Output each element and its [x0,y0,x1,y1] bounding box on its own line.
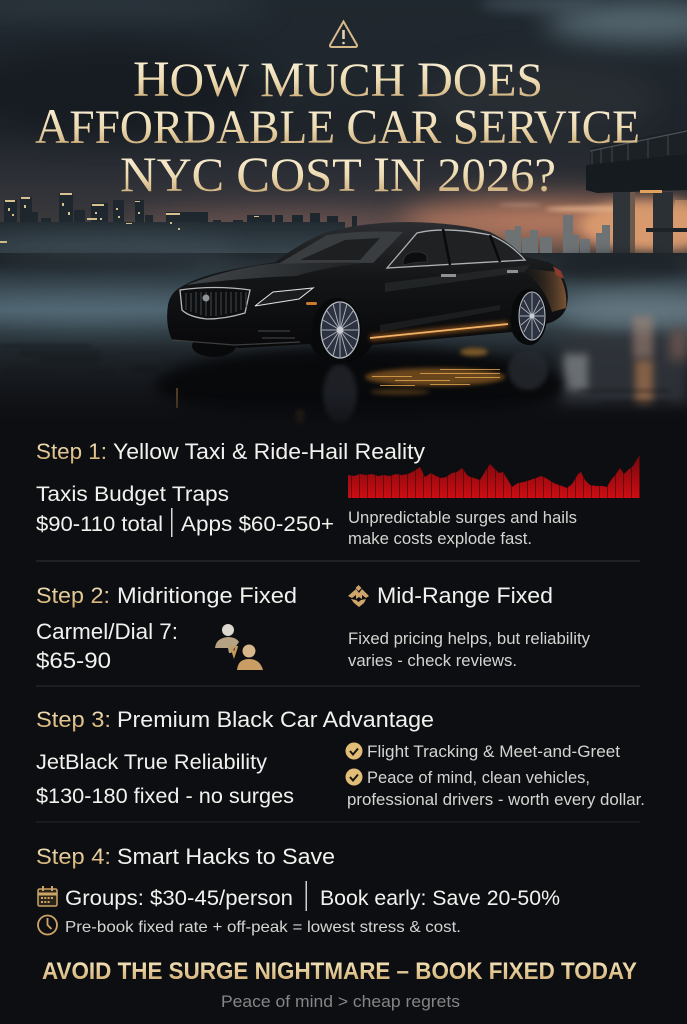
far right hazy towers [505,215,610,253]
step 2 note: varies - check reviews. [348,651,517,670]
title [35,51,640,202]
grille [180,288,250,319]
title: AFFORDABLE CAR SERVICE [35,98,640,154]
step 1 note: make costs explode fast. [348,529,532,548]
pre-book tip: Pre-book fixed rate + off-peak = lowest stress & cost. [65,919,461,936]
icon: check flight tracking [346,742,362,760]
savings line: Groups: $30-45/person [65,887,293,910]
windshield [278,231,403,264]
front wheel [312,298,362,364]
luxury black sedan [167,222,568,364]
peace of mind text [347,768,645,809]
peace of mind text: professional drivers - worth every dollar. [347,790,645,809]
rear quarter bronze reflection [520,268,566,312]
step 3 heading: Step 3: [36,707,111,732]
step 2 note [348,629,590,670]
side windows [388,230,523,268]
step 3 panel [36,707,645,809]
step 1 note [348,508,577,548]
step 3 heading: Premium Black Car Advantage [117,707,434,732]
step 1 pricing: Apps $60-250+ [181,512,334,536]
step 1 pricing [36,482,334,537]
window chrome [387,230,525,268]
amber sill glow strip [370,324,508,338]
lower bumper [172,331,300,345]
title: HOW MUCH DOES [133,51,543,108]
step 2 note: Fixed pricing helps, but reliability [348,629,590,648]
tagline: Peace of mind > cheap regrets [221,992,460,1011]
step 3 pricing: JetBlack True Reliability [36,750,267,774]
rear wheel [511,289,547,345]
headlight [255,288,313,306]
step 1 pricing: Taxis Budget Traps [36,482,229,506]
amber reflection [176,348,505,424]
amber marker [306,302,317,305]
peace of mind text: Peace of mind, clean vehicles, [367,768,590,787]
hero scene: stormy sky and skyline [0,0,687,256]
mid-range heading: Mid-Range Fixed [377,583,553,608]
step 2 pricing [36,619,178,673]
step 4 heading: Smart Hacks to Save [117,844,335,869]
hood highlight [186,262,372,285]
step 2 heading [36,583,297,608]
tail light [553,266,564,279]
step 3 pricing: $130-180 fixed - no surges [36,784,294,808]
savings line [65,881,560,911]
front tyre under body [192,335,236,357]
step 2 heading: Midritionge Fixed [117,583,297,608]
step 3 pricing [36,750,294,808]
wet ground and fog [0,240,687,435]
red surge bar chart [348,455,640,498]
door handle [441,270,518,277]
icon: mid-range emblem [348,585,369,607]
icon: two people [215,624,263,670]
icon: calendar [38,886,57,906]
step 2 pricing: $65-90 [36,648,111,673]
title: NYC COST IN 2026? [120,146,556,202]
lit windows [0,193,259,243]
step 1 note: Unpredictable surges and hails [348,508,577,527]
warning icon [330,22,357,47]
flight tracking text: Flight Tracking & Meet-and-Greet [367,742,620,761]
step 1 panel [36,439,640,548]
terrace structure at right [586,128,687,253]
savings line: Book early: Save 20-50% [320,887,560,910]
step 2 heading: Step 2: [36,583,110,608]
step 2 panel [36,583,590,673]
icon: clock [38,916,57,934]
call to action: AVOID THE SURGE NIGHTMARE – BOOK FIXED TODAY [42,958,637,985]
step 1 heading: Step 1: [36,439,107,464]
icon: check peace of mind [346,768,362,786]
step 2 pricing: Carmel/Dial 7: [36,619,178,644]
step 4 heading: Step 4: [36,844,111,869]
step 1 heading: Yellow Taxi & Ride-Hail Reality [113,439,426,464]
mirror [403,252,427,265]
car body [167,222,568,363]
step 1 pricing: $90-110 total [36,512,163,536]
door panel sheen [385,265,530,292]
step 4 panel [36,844,560,936]
left dark towers [4,193,357,226]
